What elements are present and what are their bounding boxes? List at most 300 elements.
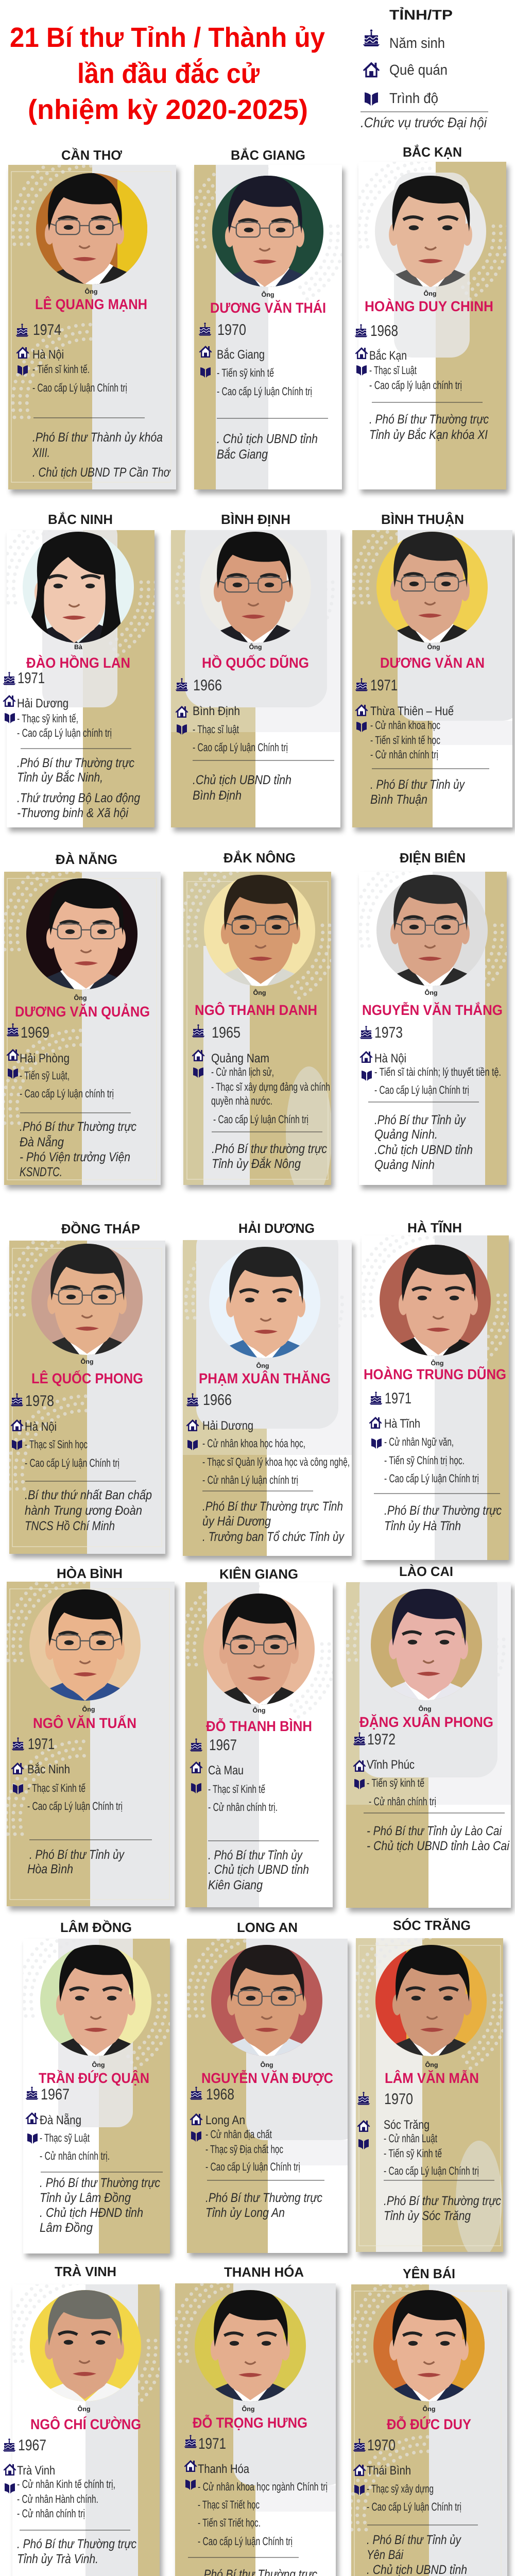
hometown: Hà Nội — [25, 1420, 57, 1434]
icon: education — [177, 724, 187, 735]
title: lần đầu đắc cử — [77, 58, 260, 89]
education — [32, 363, 127, 394]
panel: Thanh Hóa — [171, 2264, 347, 2576]
photo: Đào Hồng Lan — [23, 532, 134, 643]
hometown: Hải Dương — [202, 1419, 253, 1433]
education: - Tiến sĩ kinh tế. — [32, 363, 90, 376]
hometown: Bắc Kạn — [369, 349, 407, 363]
previous position: . Phó Bí thư Thường trực — [369, 412, 489, 427]
icon: hometown — [359, 1051, 373, 1063]
education: - Cao cấp Lý luận Chính trị — [193, 741, 288, 754]
province heading: LÀO CAI — [399, 1564, 453, 1579]
previous position: ủy Hải Dương — [202, 1514, 271, 1529]
education — [217, 366, 312, 398]
icon: hometown — [3, 2464, 16, 2476]
name: DƯƠNG VĂN QUẢNG — [15, 1003, 150, 1020]
previous position — [40, 2176, 160, 2235]
legend: hometown: Quê quán — [389, 62, 448, 78]
province heading: ĐỒNG THÁP — [61, 1221, 140, 1236]
previous position — [27, 1848, 125, 1876]
icon: hometown — [11, 1762, 24, 1774]
previous position: Quảng Ninh. — [374, 1127, 438, 1142]
education: - Cử nhân Ngữ văn, — [384, 1435, 454, 1448]
previous position: Đà Nẵng — [20, 1135, 64, 1149]
previous position: .Thứ trưởng Bộ Lao động — [17, 791, 140, 805]
education — [208, 1783, 278, 1814]
previous position: . Chủ tịch HĐND tỉnh — [40, 2206, 143, 2220]
education: - Cử nhân chính trị — [370, 748, 438, 761]
icon: education — [200, 367, 211, 378]
hometown: Thái Bình — [367, 2464, 411, 2478]
hometown: Thanh Hóa — [198, 2462, 250, 2476]
previous position: Quảng Ninh — [374, 1158, 435, 1172]
hometown: Bắc Ninh — [27, 1762, 70, 1776]
education: - Tiến sĩ Triết học. — [198, 2516, 261, 2529]
icon: birth year — [6, 1023, 20, 1037]
province heading: HẢI DƯƠNG — [238, 1221, 315, 1236]
icon: birth year — [11, 1737, 25, 1751]
honorific: Ông — [423, 290, 437, 297]
honorific: Ông — [256, 1362, 269, 1369]
education — [384, 2132, 479, 2177]
name: HOÀNG TRUNG DŨNG — [364, 1366, 506, 1382]
icon: birth year — [15, 324, 29, 337]
legend heading: TỈNH/TP — [389, 7, 453, 23]
honorific: Ông — [422, 2405, 436, 2413]
previous position — [193, 773, 291, 803]
education: - Thạc sĩ luật — [193, 723, 239, 736]
previous position — [205, 2191, 322, 2220]
icon: birth year — [354, 324, 368, 337]
hometown: Sóc Trăng — [384, 2118, 430, 2132]
education: - Cao cấp Lý luận Chính trị — [27, 1800, 123, 1812]
birth year: 1970 — [367, 2437, 396, 2454]
birth year: 1967 — [41, 2086, 70, 2103]
name: ĐẶNG XUÂN PHONG — [359, 1714, 493, 1730]
icon: birth year — [359, 1026, 373, 1039]
birth year: 1971 — [198, 2435, 226, 2452]
title: 21 Bí thư Tỉnh / Thành ủy — [10, 22, 325, 53]
previous position: .Chủ tịch UBND tỉnh — [193, 773, 291, 787]
education: - Tiến sỹ kinh tế — [217, 366, 274, 379]
education: - Cao cấp Lý luận Chính trị — [384, 2164, 479, 2177]
province heading: ĐIỆN BIÊN — [400, 850, 466, 866]
birth year: 1972 — [367, 1731, 396, 1748]
previous position: Yên Bái — [367, 2548, 404, 2562]
education — [25, 1438, 119, 1469]
honorific: Bà — [74, 643, 82, 651]
province heading: HÀ TĨNH — [407, 1220, 462, 1235]
icon: birth year — [3, 672, 15, 685]
icon: hometown — [186, 1419, 199, 1431]
panel: Yên Bái — [350, 2266, 510, 2576]
card background — [350, 2268, 510, 2576]
hometown: Hải Phòng — [20, 1052, 70, 1065]
education: - Cao cấp Lý luận Chính trị — [205, 2160, 300, 2173]
previous position — [384, 2194, 501, 2223]
previous position — [17, 2537, 136, 2566]
icon: birth year — [353, 1732, 366, 1745]
card background — [171, 510, 343, 832]
name: LÂM VĂN MẪN — [385, 2070, 479, 2086]
province heading: BẮC GIANG — [231, 147, 305, 163]
previous position — [212, 1142, 327, 1171]
previous position: Tỉnh ủy Lâm Đồng — [40, 2191, 131, 2205]
education: - Thạc sĩ Kinh tế — [27, 1782, 85, 1794]
birth year: 1966 — [203, 1392, 232, 1409]
province heading: ĐÀ NẴNG — [56, 852, 117, 867]
photo: Lâm Văn Mẫn — [375, 1942, 487, 2056]
previous position: Tỉnh ủy Bắc Ninh, — [17, 770, 103, 785]
previous position: Bình Định — [193, 788, 242, 803]
education: - Cao cấp Lý luận Chính trị — [25, 1456, 119, 1469]
education: - Thạc sĩ Luật — [369, 364, 417, 377]
previous position: .Chủ tịch UBND tỉnh — [374, 1143, 473, 1157]
honorific: Ông — [261, 2061, 273, 2069]
panel: Trà Vinh — [3, 2264, 163, 2576]
panel: Đồng Tháp — [8, 1221, 168, 1558]
birth year: 1965 — [212, 1024, 241, 1041]
education: - Tiến sĩ kinh tế học — [370, 734, 440, 747]
panel: Bắc Ninh — [0, 510, 157, 832]
province heading: KIÊN GIANG — [219, 1566, 298, 1582]
icon: birth year — [3, 2438, 15, 2451]
icon: birth year — [26, 2087, 38, 2100]
previous position — [202, 1499, 345, 1544]
previous position — [25, 1488, 152, 1533]
icon: education — [185, 2480, 196, 2490]
birth year: 1971 — [370, 677, 398, 694]
card background — [6, 1568, 177, 1910]
panel: Hải Dương — [183, 1221, 354, 1560]
province heading: BÌNH ĐỊNH — [221, 512, 290, 527]
name: ĐỖ TRỌNG HƯNG — [193, 2414, 307, 2431]
photo: Trần Đức Quận — [40, 1942, 152, 2056]
icon: education — [27, 2133, 38, 2144]
previous position: . Chủ tịch UBND tỉnh — [208, 1862, 309, 1877]
province heading: BÌNH THUẬN — [381, 512, 464, 527]
birth year: 1971 — [28, 1736, 55, 1753]
education: - Cử nhân địa chất — [205, 2128, 272, 2141]
previous position: Tỉnh ủy Trà Vinh. — [17, 2552, 98, 2566]
icon: education — [365, 92, 378, 106]
previous position: XIII. — [32, 446, 50, 460]
birth year: 1968 — [370, 323, 398, 340]
birth year: 1970 — [384, 2091, 413, 2108]
icon: birth year — [192, 1024, 205, 1038]
hometown: Hà Nội — [32, 348, 64, 362]
previous position: . Phó Bí thư Tỉnh ủy — [367, 2533, 461, 2547]
previous position — [369, 412, 489, 442]
previous position — [367, 1824, 510, 1853]
panel: Bắc Kạn — [352, 144, 509, 494]
hometown: Hà Nội — [374, 1052, 406, 1065]
education — [367, 1776, 436, 1808]
education — [384, 1435, 479, 1485]
name: DƯƠNG VĂN AN — [380, 655, 485, 671]
card background — [187, 1922, 359, 2257]
honorific: Ông — [74, 994, 87, 1002]
previous position: Tỉnh ủy Đắk Nông — [212, 1157, 301, 1171]
education — [211, 1065, 330, 1126]
birth year: 1971 — [385, 1390, 411, 1407]
honorific: Ông — [77, 2405, 91, 2413]
legend — [360, 7, 488, 130]
hometown: Vĩnh Phúc — [367, 1758, 415, 1772]
photo: Đỗ Đức Duy — [373, 2287, 486, 2401]
province heading: LÂM ĐỒNG — [60, 1920, 132, 1935]
panel: Đắk Nông — [181, 850, 337, 1200]
education: - Cử nhân Lý luận chính trị — [202, 1473, 298, 1486]
previous position: Bình Thuận — [370, 792, 427, 807]
name: LÊ QUỐC PHONG — [31, 1370, 143, 1386]
education: - Cử nhân chính trị — [369, 1795, 436, 1808]
icon: hometown — [355, 704, 368, 716]
photo: Dương Văn Thái — [212, 174, 323, 287]
panel: Sóc Trăng — [352, 1918, 508, 2259]
panel: Bình Định — [171, 510, 343, 832]
education — [198, 2480, 328, 2548]
icon: birth year — [186, 1393, 199, 1406]
card background — [3, 857, 163, 1189]
icon: education — [358, 2139, 369, 2149]
icon: birth year — [190, 1738, 203, 1752]
education: - Cử nhân Kinh tế chính trị, — [17, 2478, 115, 2490]
education: - Cử nhân chính trị — [17, 2507, 85, 2520]
name: ĐỖ ĐỨC DUY — [387, 2416, 471, 2432]
card background — [352, 154, 509, 494]
previous position: Tỉnh ủy Hà Tĩnh — [384, 1519, 461, 1533]
education — [370, 719, 440, 761]
birth year: 1968 — [206, 2086, 234, 2103]
previous position: Tỉnh ủy Long An — [205, 2206, 285, 2220]
name: ĐỖ THANH BÌNH — [206, 1718, 312, 1734]
previous position — [17, 756, 140, 820]
previous position: .Phó Bí thư Thường trực — [205, 2191, 322, 2205]
previous position — [374, 1113, 473, 1172]
honorific: Ông — [427, 643, 440, 651]
hometown: Quảng Nam — [211, 1052, 269, 1065]
card background — [7, 2268, 163, 2576]
education: - Cao cấp Lý luận Chính trị — [32, 381, 127, 394]
icon: hometown — [26, 2112, 38, 2124]
panel: Kiên Giang — [180, 1566, 336, 1911]
previous position — [217, 432, 318, 462]
education: - Cao cấp Lý luận Chính trị — [213, 1113, 308, 1126]
panel: Cần Thơ — [8, 147, 179, 494]
photo: Lê Quốc Phong — [31, 1241, 143, 1355]
icon: hometown — [3, 695, 15, 707]
photo: Phạm Xuân Thăng — [209, 1244, 320, 1358]
photo: Hoàng Trung Dũng — [380, 1242, 491, 1356]
panel: Bắc Giang — [189, 147, 345, 494]
education: - Thạc sĩ Quản lý khoa học và công nghệ, — [202, 1455, 350, 1468]
icon: education — [5, 713, 15, 723]
previous position — [370, 777, 465, 807]
education: - Thạc sĩ Kinh tế — [208, 1783, 265, 1795]
icon: hometown — [175, 706, 188, 718]
icon: birth year — [353, 2438, 366, 2451]
previous position: .Phó Bí thư Thường trực — [20, 1120, 136, 1134]
education: quyền nhà nước. — [211, 1094, 272, 1107]
education: - Cử nhân Hành chính. — [17, 2493, 98, 2505]
previous position: Tỉnh ủy Sóc Trăng — [384, 2209, 471, 2223]
province heading: BẮC NINH — [48, 512, 113, 527]
title: (nhiệm kỳ 2020-2025) — [28, 94, 308, 125]
photo: Hồ Quốc Dũng — [213, 532, 294, 643]
previous position — [32, 430, 171, 480]
previous position: .Phó Bí thư thường trực — [212, 1142, 327, 1156]
previous position: Kiên Giang — [208, 1878, 263, 1892]
province heading: YÊN BÁI — [403, 2266, 455, 2281]
panel: Lâm Đồng — [17, 1920, 173, 2258]
education — [367, 2482, 461, 2513]
icon: education — [356, 722, 367, 732]
icon: birth year — [370, 1392, 382, 1404]
previous position: . Trưởng ban Tổ chức Tỉnh ủy — [202, 1530, 345, 1544]
honorific: Ông — [253, 989, 266, 996]
icon: hometown — [355, 347, 368, 359]
previous position: .Phó Bí thư Thành ủy khóa — [32, 430, 163, 445]
icon: hometown — [184, 2460, 197, 2472]
card background — [17, 1922, 173, 2258]
previous position: TNCS Hồ Chí Minh — [25, 1519, 115, 1533]
education: - Cao cấp Lý luận Chính trị — [374, 1083, 469, 1096]
photo: Dương Văn An — [376, 528, 488, 643]
hometown: Trà Vinh — [17, 2464, 55, 2478]
icon: birth year — [190, 2087, 203, 2100]
birth year: 1974 — [33, 321, 61, 338]
name: PHẠM XUÂN THĂNG — [199, 1370, 331, 1386]
card background — [0, 510, 157, 832]
education: - Cao cấp Lý luận chính trị — [20, 1087, 114, 1100]
province heading: SÓC TRĂNG — [393, 1918, 471, 1933]
education: - Cao cấp Lý luận Chính trị — [384, 1472, 479, 1485]
card background — [171, 2267, 347, 2576]
education: - Cử nhân lịch sử, — [211, 1065, 274, 1078]
name: NGÔ CHÍ CƯỜNG — [30, 2416, 141, 2432]
education: - Cử nhân Luật — [384, 2132, 437, 2145]
legend: previous position: .Chức vụ trước Đại hội — [360, 115, 487, 130]
education: - Tiến sỹ Luật, — [20, 1069, 70, 1082]
education: - Thạc sỹ xây dựng — [367, 2482, 434, 2495]
card background — [352, 1923, 508, 2259]
icon: birth year — [355, 678, 368, 691]
education — [369, 364, 462, 392]
panel: Long An — [187, 1920, 359, 2257]
card background — [346, 1566, 513, 1912]
education: - Thạc sĩ Triết học — [198, 2498, 260, 2511]
icon: hometown — [353, 1760, 366, 1772]
photo: Đỗ Trọng Hưng — [195, 2287, 306, 2401]
honorific: Ông — [252, 1706, 266, 1714]
honorific: Ông — [249, 643, 262, 651]
photo: Ngô Thanh Danh — [204, 871, 315, 986]
legend: birth year: Năm sinh — [389, 35, 445, 51]
birth year: 1969 — [21, 1024, 49, 1041]
icon: hometown — [190, 2113, 203, 2125]
previous position: .Phó Bí thư Thường trực Tỉnh — [202, 1499, 343, 1514]
icon: birth year — [363, 29, 380, 46]
education: - Thạc sỹ Địa chất học — [205, 2143, 283, 2156]
card background — [181, 853, 337, 1200]
icon: hometown — [369, 1417, 382, 1429]
photo: Nguyễn Văn Được — [211, 1942, 322, 2056]
education: - Cao cấp Lý luận chính trị — [17, 726, 112, 739]
honorific: Ông — [84, 287, 98, 295]
panel: Điện Biên — [353, 850, 509, 1189]
icon: hometown — [16, 347, 29, 359]
education: - Tiến sỹ kinh tế — [367, 1776, 424, 1789]
birth year: 1971 — [18, 670, 45, 687]
education: - Thạc sỹ kinh tế, — [17, 712, 78, 725]
honorific: Ông — [425, 2061, 438, 2069]
icon: hometown — [199, 346, 212, 358]
icon: birth year — [357, 2092, 370, 2105]
education — [205, 2128, 300, 2173]
previous position: hành Trung ương Đoàn — [25, 1503, 142, 1518]
icon: hometown — [357, 2120, 370, 2132]
card background — [8, 151, 179, 494]
icon: birth year — [175, 678, 188, 691]
education — [27, 1782, 123, 1812]
legend: education: Trình độ — [389, 90, 438, 106]
photo: Đỗ Thanh Bình — [203, 1591, 315, 1705]
card background — [183, 1225, 354, 1560]
education: - Cử nhân khoa học ngành Chính trị — [198, 2480, 328, 2493]
previous position: . Chủ tịch UBND tỉnh — [217, 432, 318, 446]
province heading: LONG AN — [237, 1920, 298, 1935]
icon: education — [371, 1438, 382, 1449]
name: LÊ QUANG MẠNH — [35, 296, 147, 312]
hometown: Đà Nẵng — [40, 2113, 81, 2127]
card background — [352, 510, 515, 832]
photo: Hoàng Duy Chinh — [375, 170, 486, 287]
card background — [189, 154, 345, 494]
photo: Ngô Chí Cường — [30, 2286, 141, 2401]
photo: Đặng Xuân Phong — [371, 1586, 482, 1700]
icon: education — [362, 1071, 372, 1081]
province heading: ĐẮK NÔNG — [224, 850, 296, 866]
hometown: Hà Tĩnh — [384, 1417, 420, 1431]
previous position: . Phó Bí thư Tỉnh ủy — [29, 1848, 125, 1862]
education — [17, 2478, 115, 2520]
icon: hometown — [10, 1419, 24, 1431]
education: - Cử nhân khoa học — [370, 719, 440, 732]
education: - Cử nhân khoa học hóa học, — [202, 1437, 305, 1450]
honorific: Ông — [242, 2405, 254, 2413]
panel: Hà Tĩnh — [356, 1220, 512, 1564]
education: - Thạc sĩ xây dựng đảng và chính — [211, 1080, 330, 1093]
education: - Cử nhân chính trị. — [208, 1801, 278, 1814]
previous position — [20, 1120, 136, 1179]
panel: Hòa Bình — [6, 1566, 177, 1910]
name: NGÔ VĂN TUẤN — [33, 1715, 136, 1731]
hometown: Bắc Giang — [217, 348, 265, 362]
name: HOÀNG DUY CHINH — [365, 298, 493, 314]
icon: education — [13, 1784, 23, 1794]
card background — [356, 1223, 512, 1564]
icon: hometown — [190, 1761, 203, 1773]
birth year: 1967 — [209, 1737, 237, 1754]
previous position: Bắc Giang — [217, 447, 268, 462]
icon: hometown — [363, 62, 380, 77]
education: - Tiến sỹ Chính trị học. — [384, 1454, 465, 1467]
previous position: . Phó Bí thư Tỉnh ủy — [370, 777, 465, 792]
previous position: Lâm Đồng — [40, 2221, 93, 2235]
previous position: -Thương binh & Xã hội — [17, 806, 129, 820]
birth year: 1978 — [25, 1393, 54, 1410]
